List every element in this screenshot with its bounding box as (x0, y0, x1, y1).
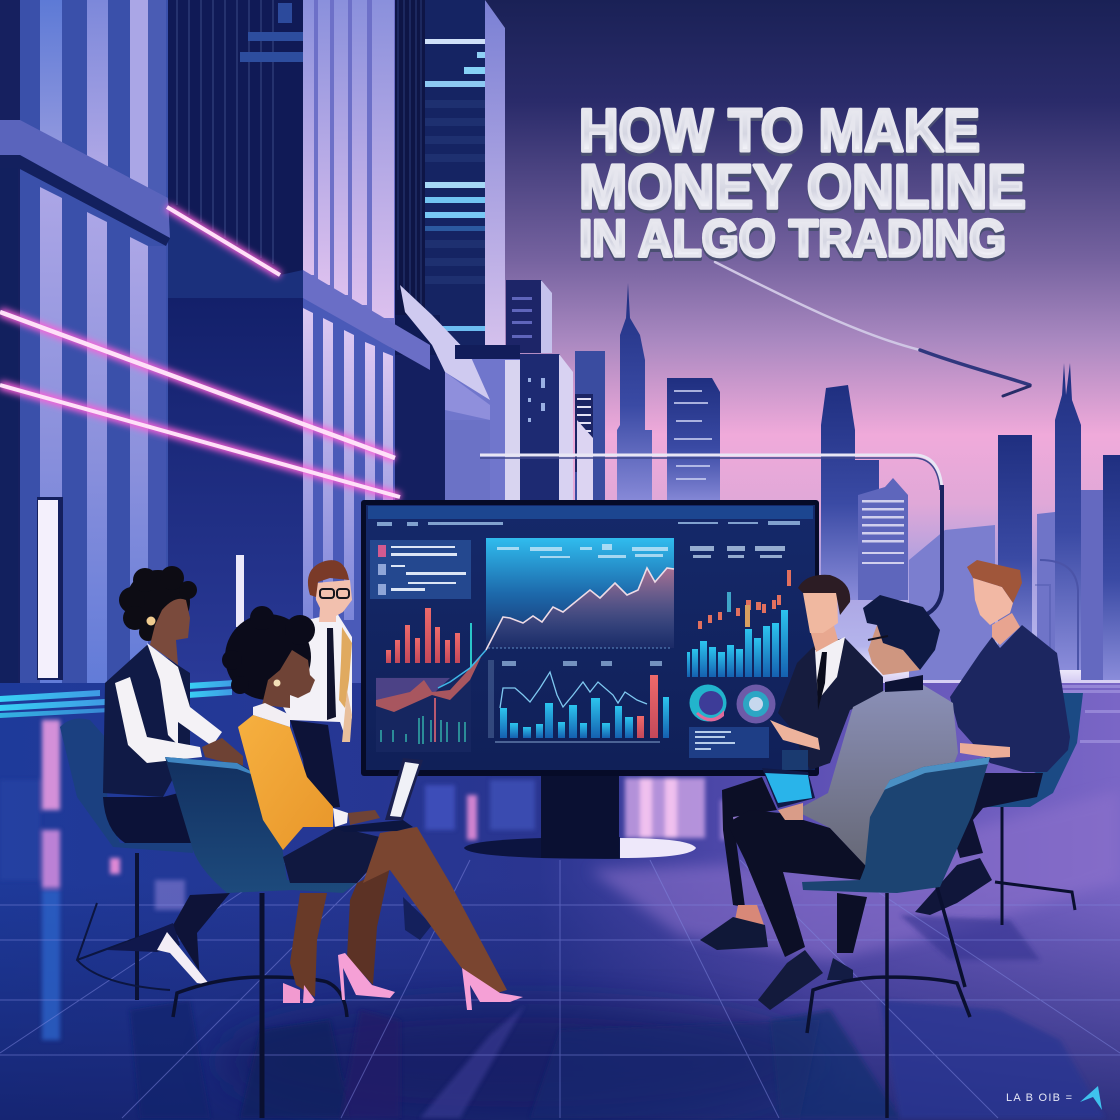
floor reflections (0, 720, 760, 1040)
white sleeve (115, 677, 202, 763)
vest (103, 645, 190, 797)
hair (798, 575, 850, 615)
title face: IN ALGO TRADING (579, 210, 1006, 268)
sleeve glow (342, 690, 352, 742)
chair (802, 757, 990, 893)
top right stat row (690, 546, 785, 558)
rear sneaker (827, 958, 853, 980)
tablet (762, 768, 815, 808)
right bar chart (687, 610, 788, 677)
skirt (103, 790, 196, 843)
title shadow: HOW TO MAKE (579, 100, 980, 167)
neck (810, 622, 838, 652)
yellow sweater (238, 715, 333, 850)
mid building band under neon (165, 205, 303, 298)
dark shoe behind (403, 897, 432, 940)
red bar chart (386, 608, 460, 663)
jacket (800, 683, 958, 865)
mid building window lines (177, 0, 273, 264)
face (868, 625, 920, 675)
stand base (464, 837, 696, 859)
shirt collar (253, 703, 290, 727)
distant skyline (506, 280, 1120, 680)
suit (778, 638, 883, 770)
person: man in navy shirt (915, 560, 1083, 925)
mid building lavender stripes (303, 0, 395, 330)
left building (0, 0, 170, 700)
neon light strip middle (0, 312, 395, 458)
tie (327, 628, 336, 720)
trousers (727, 810, 867, 957)
title face (579, 97, 1026, 268)
ankle (735, 905, 764, 925)
main area chart (486, 538, 674, 650)
mid building ledge (303, 270, 430, 370)
hair (863, 595, 940, 670)
sneaker (758, 950, 823, 1010)
people reflections (130, 915, 1105, 1118)
hair (308, 560, 349, 597)
skirt (283, 827, 380, 883)
lit doorway left (37, 497, 63, 680)
cuff (333, 808, 348, 827)
monitor frame (361, 500, 819, 776)
face (803, 593, 838, 633)
laptop (333, 758, 423, 832)
hair (222, 606, 315, 700)
neck (992, 613, 1020, 645)
shirt (815, 637, 845, 700)
floor dark centre (220, 1004, 820, 1120)
face and neck (150, 599, 190, 665)
chair: yellow-top woman (165, 757, 357, 1118)
face (262, 650, 315, 708)
hand (770, 720, 820, 750)
light floor patch behind right seats (590, 790, 1120, 960)
left info panel (370, 540, 471, 599)
person: woman in black vest (103, 566, 243, 985)
far leg behind (290, 893, 327, 997)
hand (960, 743, 1010, 758)
floor grid (0, 860, 1120, 1118)
leg middle (347, 867, 390, 985)
lower combo chart (488, 660, 669, 743)
mid building lower section (165, 298, 435, 683)
header row text (377, 521, 800, 526)
title (579, 97, 1026, 271)
leg (172, 893, 230, 985)
title face: HOW TO MAKE (579, 97, 980, 164)
left small area chart (376, 650, 486, 752)
water streaks right (990, 685, 1120, 743)
monitor stand (541, 775, 619, 858)
trousers (722, 777, 777, 907)
hand (348, 810, 380, 825)
floor left cyan light bands (0, 680, 235, 718)
shoe far (283, 983, 315, 1003)
sneaker (915, 858, 992, 915)
chair (995, 800, 1075, 925)
top bar (368, 506, 813, 519)
round dial right (736, 684, 776, 724)
glasses (320, 589, 349, 598)
trousers (945, 773, 1043, 858)
pink heel middle (338, 953, 395, 1000)
round dial left (690, 684, 726, 722)
pink heel near (462, 968, 523, 1010)
heel shoe (107, 923, 210, 985)
hair (967, 560, 1022, 603)
collar (885, 675, 923, 692)
person: woman in yellow sweater (222, 606, 523, 1010)
white shirt (147, 643, 178, 745)
title shadow: MONEY ONLINE (579, 156, 1026, 225)
sneaker (700, 917, 768, 950)
railing frame (480, 455, 942, 615)
face (315, 580, 352, 622)
right tower (393, 0, 505, 345)
shirt (283, 613, 352, 742)
person: man in black suit (700, 575, 883, 950)
earring (146, 616, 156, 626)
logo icon (1080, 1086, 1102, 1110)
light streak in sky (715, 262, 1030, 396)
title face: MONEY ONLINE (579, 153, 1026, 222)
hand (778, 803, 803, 820)
hands (202, 738, 243, 767)
tie (817, 652, 827, 710)
chair post (807, 887, 970, 1118)
right candlestick chart (698, 570, 791, 629)
bottom note box (689, 727, 769, 758)
chair: left woman (60, 719, 193, 1000)
cyan rising marker (470, 623, 472, 668)
lanyard (339, 627, 352, 708)
mid building upper dark (165, 0, 305, 300)
earring (274, 680, 280, 686)
right lamp post (1035, 560, 1078, 670)
rear leg (837, 893, 867, 953)
lit doorway right (236, 555, 244, 627)
face (973, 578, 1013, 625)
floor (0, 683, 1120, 1120)
logo text: LA B OIB = (1006, 1092, 1072, 1104)
neon light strip lower (0, 385, 400, 497)
near leg (363, 827, 507, 993)
monitor (361, 500, 819, 776)
hair (119, 566, 197, 641)
neon light strip upper (167, 207, 280, 275)
person: man in grey jacket (727, 595, 990, 1118)
title shadow: IN ALGO TRADING (579, 213, 1006, 271)
floor bottom shading (0, 880, 1120, 1120)
terrace blocks (390, 285, 520, 505)
title shadow (579, 100, 1026, 271)
right arm (178, 667, 222, 746)
trousers (290, 720, 340, 810)
mid building signage (240, 3, 303, 62)
tablet stand (782, 750, 808, 770)
glasses (868, 636, 888, 640)
monitor screen (366, 505, 815, 770)
person: standing man with glasses (283, 560, 352, 810)
shirt (950, 625, 1070, 772)
sky background (0, 0, 1120, 690)
